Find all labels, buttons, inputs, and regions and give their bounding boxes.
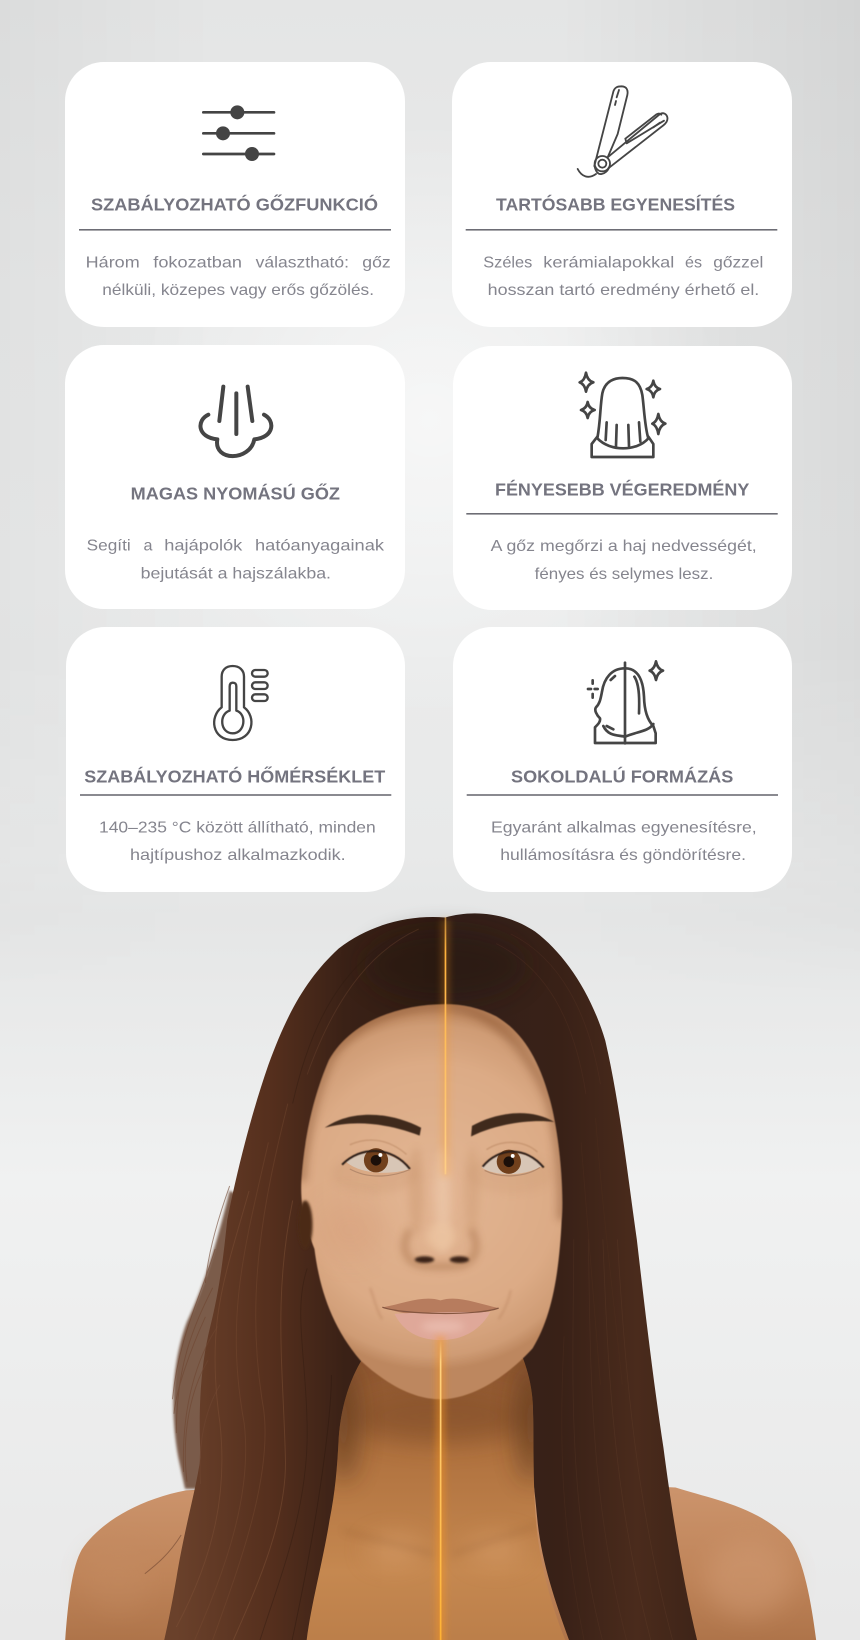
background xyxy=(0,0,860,835)
face xyxy=(301,1004,562,1399)
icon: hair straightener xyxy=(578,86,667,177)
heading: SZABÁLYOZHATÓ GŐZFUNKCIÓ xyxy=(91,194,378,215)
body text: gőzzel xyxy=(713,254,763,271)
panel: high pressure steam xyxy=(65,345,405,609)
chest shading xyxy=(84,1365,792,1617)
body text: Széles xyxy=(483,254,532,271)
light line xyxy=(436,917,450,1640)
card background xyxy=(453,627,792,892)
card background xyxy=(65,62,405,327)
body text: választható: xyxy=(256,254,349,271)
body text xyxy=(87,538,385,582)
heading: FÉNYESEBB VÉGEREDMÉNY xyxy=(495,479,750,500)
icon: shiny hair xyxy=(580,373,665,457)
body text: hajápolók xyxy=(164,538,243,555)
left eye xyxy=(342,1140,410,1176)
right hair xyxy=(445,913,702,1640)
body text: a xyxy=(144,538,153,555)
card background xyxy=(65,345,405,609)
body text: gőz xyxy=(362,254,391,271)
body text xyxy=(491,538,757,583)
right eye xyxy=(482,1142,544,1176)
body text: hajtípushoz alkalmazkodik. xyxy=(130,847,346,864)
body text xyxy=(483,254,763,299)
body text: nélküli, közepes vagy erős gőzölés. xyxy=(102,282,374,299)
left hair strands xyxy=(176,929,419,1640)
left eyebrow xyxy=(325,1115,421,1136)
icon: half straight half wavy hair xyxy=(588,661,663,743)
body text xyxy=(491,820,757,864)
nose xyxy=(405,1223,476,1267)
right eyebrow xyxy=(471,1113,554,1137)
panel: shinier result xyxy=(453,346,792,610)
crown shading xyxy=(363,929,528,1002)
ear shadow xyxy=(298,1201,313,1249)
body text: Segíti xyxy=(87,538,131,555)
card background xyxy=(453,346,792,610)
left hair xyxy=(159,917,445,1640)
body text xyxy=(99,820,376,864)
body text: A gőz megőrzi a haj nedvességét, xyxy=(491,538,757,555)
card background xyxy=(66,627,405,892)
body text xyxy=(86,254,391,299)
body text: hullámosításra és göndörítésre. xyxy=(500,847,746,864)
icon: steam nose xyxy=(200,387,271,456)
frizzy hair wisps xyxy=(145,1186,230,1574)
body text: fokozatban xyxy=(153,254,242,271)
neck and chest xyxy=(305,1358,574,1640)
frizzy outer hair xyxy=(173,1191,273,1489)
body text: hosszan tartó eredmény érhető el. xyxy=(488,282,759,299)
portrait photo xyxy=(64,913,819,1640)
lips xyxy=(382,1299,499,1340)
heading: MAGAS NYOMÁSÚ GŐZ xyxy=(131,482,340,503)
body text: 140–235 °C között állítható, minden xyxy=(99,820,376,837)
right hair strands xyxy=(496,934,678,1640)
panel: adjustable steam xyxy=(65,62,405,327)
icon: sliders xyxy=(203,105,274,161)
body text: és xyxy=(685,254,702,271)
panel: longer lasting straightening xyxy=(452,62,792,327)
body text: fényes és selymes lesz. xyxy=(535,566,713,583)
body text: hatóanyagainak xyxy=(255,538,385,555)
panel: adjustable temperature xyxy=(66,627,405,892)
body text: Egyaránt alkalmas egyenesítésre, xyxy=(491,820,757,837)
body text: Három xyxy=(86,254,140,271)
panel: versatile styling xyxy=(453,627,792,892)
heading: TARTÓSABB EGYENESÍTÉS xyxy=(496,194,735,215)
heading: SOKOLDALÚ FORMÁZÁS xyxy=(511,766,733,787)
heading: SZABÁLYOZHATÓ HŐMÉRSÉKLET xyxy=(84,766,386,787)
body text: bejutását a hajszálakba. xyxy=(141,565,331,582)
card background xyxy=(452,62,792,327)
body text: kerámialapokkal xyxy=(543,254,674,271)
left and right shoulders xyxy=(64,1482,819,1640)
icon: thermometer xyxy=(214,666,268,740)
